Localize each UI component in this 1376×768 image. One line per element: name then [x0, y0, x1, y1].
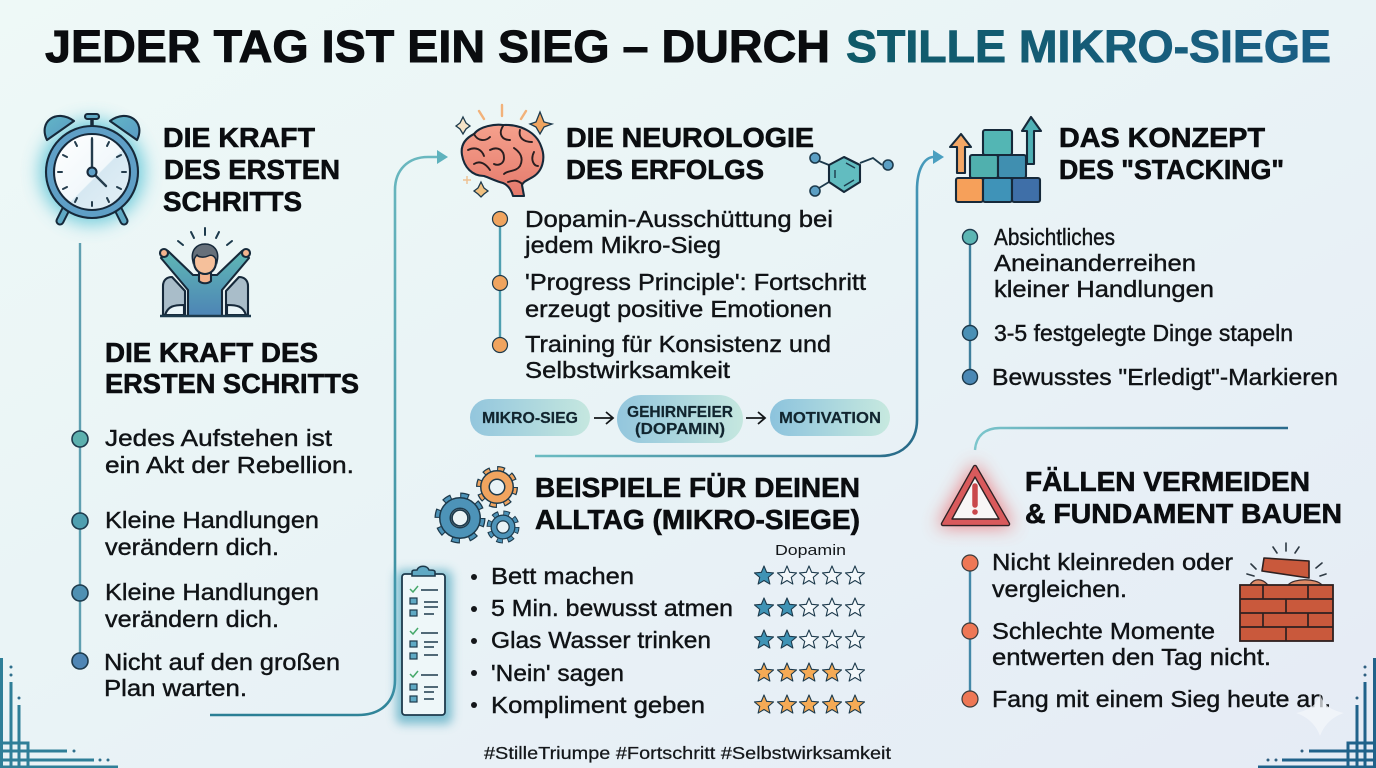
heading: die Kraft des ersten Schritts: SCHRITTS: [163, 186, 302, 217]
heading: die Neurologie des Erfolgs: DIE NEUROLOGIE: [566, 122, 814, 153]
icon: checklist clipboard: [396, 566, 452, 724]
text: left bullets: ein Akt der Rebellion.: [105, 452, 354, 478]
arrow: flow 2: [746, 412, 765, 424]
heading: die Kraft des ersten Schritts: DES ERSTEN: [164, 154, 340, 185]
heading: die Kraft des ersten Schritts 2: [105, 337, 359, 399]
text: neurology bullets: Training für Konsistenz und: [525, 331, 831, 357]
text: neurology bullets: [524, 206, 867, 383]
timeline: left column: [72, 243, 88, 669]
corner decoration: bottom left: [0, 658, 118, 768]
heading: Fallen vermeiden: & FUNDAMENT BAUEN: [1025, 498, 1342, 529]
arrow: left column to neurology: [210, 150, 448, 715]
text: neurology bullets: Selbstwirksamkeit: [525, 357, 731, 383]
list: examples: Glas Wasser trinken: [491, 627, 711, 653]
text: left bullets: Kleine Handlungen: [105, 507, 319, 533]
text: left bullets: [104, 425, 354, 701]
sparkle watermark: [1296, 693, 1344, 736]
list: examples: [471, 563, 733, 718]
text: trap bullets: Schlechte Momente: [992, 618, 1215, 644]
arrow: stacking to traps: [975, 428, 1288, 450]
heading: die Kraft des ersten Schritts: DIE KRAFT: [163, 122, 315, 153]
heading: Fallen vermeiden: FÄLLEN VERMEIDEN: [1025, 466, 1310, 497]
text: left bullets: Jedes Aufstehen ist: [105, 425, 333, 451]
pill: Gehirnfeier: (DOPAMIN): [635, 421, 725, 438]
timeline: trap bullets: [962, 555, 978, 707]
text: neurology bullets: erzeugt positive Emotionen: [525, 296, 832, 322]
list: examples: 5 Min. bewusst atmen: [491, 595, 733, 621]
text: left bullets: Nicht auf den großen: [104, 649, 340, 675]
pill: Mikro-Sieg: [470, 399, 590, 436]
heading: Beispiele: [535, 472, 860, 535]
panel: die Neurologie des Erfolgs: [456, 105, 893, 443]
heading: die Kraft des ersten Schritts 2: DIE KRAFT DES: [105, 337, 318, 368]
arrow: neurology to stacking: [535, 150, 944, 456]
corner decoration: bottom right: [1258, 658, 1376, 768]
text: stacking bullets: kleiner Handlungen: [994, 276, 1214, 302]
list: examples: Bett machen: [491, 563, 634, 589]
text: left bullets: verändern dich.: [105, 606, 279, 632]
title: JEDER TAG IST EIN SIEG – DURCH: [45, 21, 830, 72]
heading: Stacking: DAS KONZEPT: [1059, 122, 1265, 153]
heading: Beispiele: BEISPIELE FÜR DEINEN: [535, 472, 860, 503]
title: STILLE MIKRO-SIEGE: [846, 21, 1331, 72]
heading: Beispiele: ALLTAG (MIKRO-SIEGE): [535, 504, 860, 535]
pill: Gehirnfeier: [617, 395, 743, 443]
text: trap bullets: [992, 549, 1331, 712]
heading: die Neurologie des Erfolgs: DES ERFOLGS: [566, 154, 764, 185]
icon: warning triangle: [937, 462, 1014, 527]
text: stacking bullets: 3-5 festgelegte Dinge stapeln: [994, 320, 1293, 346]
text: stacking bullets: Absichtliches: [994, 224, 1115, 250]
list: examples: 'Nein' sagen: [491, 660, 624, 686]
title: [45, 21, 1331, 72]
text: trap bullets: entwerten den Tag nicht.: [992, 644, 1271, 670]
icon: person rising from bed: [160, 228, 251, 316]
text: trap bullets: vergleichen.: [992, 576, 1127, 602]
icon: brain: [456, 105, 552, 197]
text: left bullets: Kleine Handlungen: [105, 579, 319, 605]
panel: die Kraft des ersten Schritts: [40, 114, 359, 701]
text: left bullets: Plan warten.: [104, 675, 247, 701]
text: neurology bullets: 'Progress Principle': Fortschritt: [525, 269, 867, 295]
icon: alarm clock: [40, 114, 144, 224]
heading: die Neurologie des Erfolgs: [566, 122, 814, 185]
pill: Mikro-Sieg: MIKRO-SIEG: [482, 410, 578, 427]
pill: Gehirnfeier: GEHIRNFEIER: [627, 404, 733, 421]
heading: Fallen vermeiden: [1025, 466, 1342, 529]
icon: brick wall: [1240, 543, 1333, 641]
text: stacking bullets: Bewusstes "Erledigt"-Markieren: [992, 364, 1338, 390]
timeline: stacking bullets: [962, 230, 978, 384]
text: stacking bullets: [992, 224, 1338, 390]
pill: Motivation: [770, 399, 890, 436]
icon: dopamine molecule: [810, 153, 893, 196]
pill: Motivation: MOTIVATION: [779, 410, 881, 427]
panel: Stacking: [950, 117, 1338, 390]
text: neurology bullets: jedem Mikro-Sieg: [524, 232, 721, 258]
heading: Stacking: DES "STACKING": [1059, 154, 1284, 185]
flow: Mikro-Sieg to Motivation: [470, 395, 890, 443]
text: trap bullets: Fang mit einem Sieg heute an.: [992, 686, 1331, 712]
panel: Fallen vermeiden: [937, 462, 1342, 712]
list: examples: Kompliment geben: [491, 692, 705, 718]
chart: dopamine star ratings: [754, 566, 865, 713]
heading: die Kraft des ersten Schritts 2: ERSTEN SCHRITTS: [105, 368, 359, 399]
icon: stacked blocks with arrows: [950, 117, 1041, 202]
icon: gears: [439, 470, 516, 540]
heading: Stacking: [1059, 122, 1284, 185]
heading: die Kraft des ersten Schritts: [163, 122, 340, 217]
timeline: neurology bullets: [492, 212, 508, 352]
text: trap bullets: Nicht kleinreden oder: [992, 549, 1233, 575]
arrow: flow 1: [594, 412, 613, 424]
text: left bullets: verändern dich.: [105, 534, 279, 560]
text: neurology bullets: Dopamin-Ausschüttung bei: [525, 206, 833, 232]
panel: Beispiele: [396, 470, 865, 724]
label: Dopamin: Dopamin: [775, 542, 846, 559]
text: stacking bullets: Aneinanderreihen: [994, 250, 1196, 276]
hashtags: #StilleTriumpe #Fortschritt #Selbstwirksamkeit: [484, 743, 891, 763]
